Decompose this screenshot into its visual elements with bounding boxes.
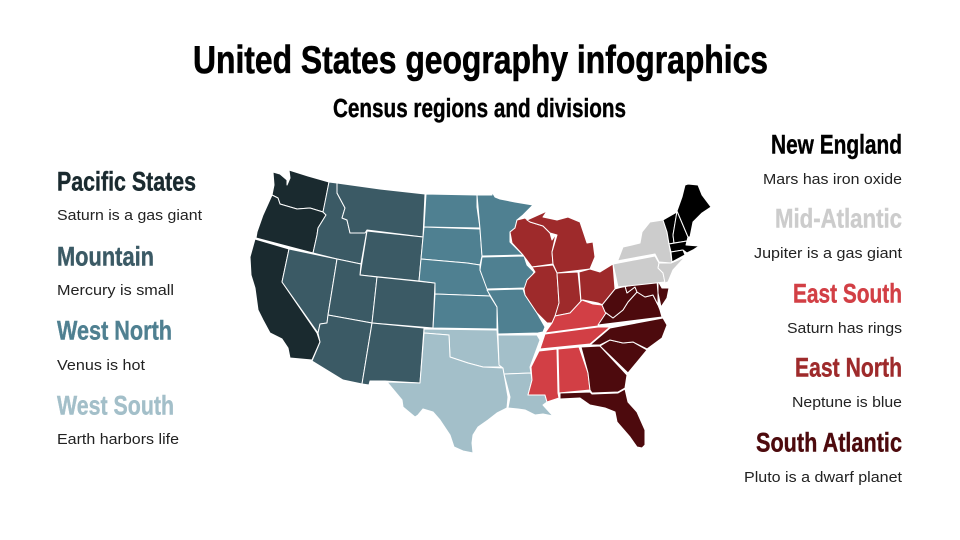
legend: East North bbox=[792, 352, 902, 411]
title: United States geography infographics bbox=[193, 39, 768, 82]
legend: New England bbox=[763, 130, 902, 188]
region: East North bbox=[510, 211, 615, 323]
legend: West North: West North bbox=[57, 316, 172, 346]
legend: South Atlantic: Pluto is a dwarf planet bbox=[744, 469, 903, 486]
legend: Pacific States: Pacific States bbox=[57, 166, 196, 196]
legend: Mid-Atlantic: Jupiter is a gas giant bbox=[754, 245, 903, 262]
legend: South Atlantic: South Atlantic bbox=[756, 428, 902, 458]
legend: East South: Saturn has rings bbox=[787, 320, 902, 337]
legend: East South bbox=[787, 278, 902, 337]
legend: East South: East South bbox=[793, 278, 902, 308]
legend: Pacific States: Saturn is a gas giant bbox=[57, 207, 203, 224]
legend: West North bbox=[57, 316, 172, 374]
legend: West South bbox=[57, 390, 179, 448]
legend: West South: West South bbox=[57, 390, 174, 420]
legend: Mountain: Mercury is small bbox=[57, 282, 174, 299]
region: West North bbox=[419, 192, 545, 334]
region: Pacific States bbox=[250, 170, 329, 360]
region: South Atlantic bbox=[560, 281, 669, 448]
legend: Pacific States bbox=[57, 166, 203, 224]
subtitle: Census regions and divisions bbox=[333, 95, 626, 123]
legend: East North: Neptune is blue bbox=[792, 394, 902, 411]
legend: South Atlantic bbox=[744, 428, 903, 486]
US map bbox=[250, 170, 711, 453]
legend: East North: East North bbox=[795, 352, 902, 382]
region: East South bbox=[528, 300, 610, 402]
legend: West North: Venus is hot bbox=[57, 357, 146, 374]
legend: Mountain bbox=[57, 242, 174, 299]
region: New England bbox=[663, 184, 711, 262]
legend: Mid-Atlantic: Mid-Atlantic bbox=[775, 204, 902, 234]
region: West South bbox=[387, 329, 553, 453]
legend: Mid-Atlantic bbox=[754, 204, 903, 262]
legend: New England: New England bbox=[771, 130, 902, 160]
legend: New England: Mars has iron oxide bbox=[763, 171, 902, 188]
legend: West South: Earth harbors life bbox=[57, 431, 179, 448]
legend: Mountain: Mountain bbox=[57, 242, 154, 272]
region: Mountain bbox=[282, 182, 435, 385]
region: Mid-Atlantic bbox=[613, 220, 685, 287]
